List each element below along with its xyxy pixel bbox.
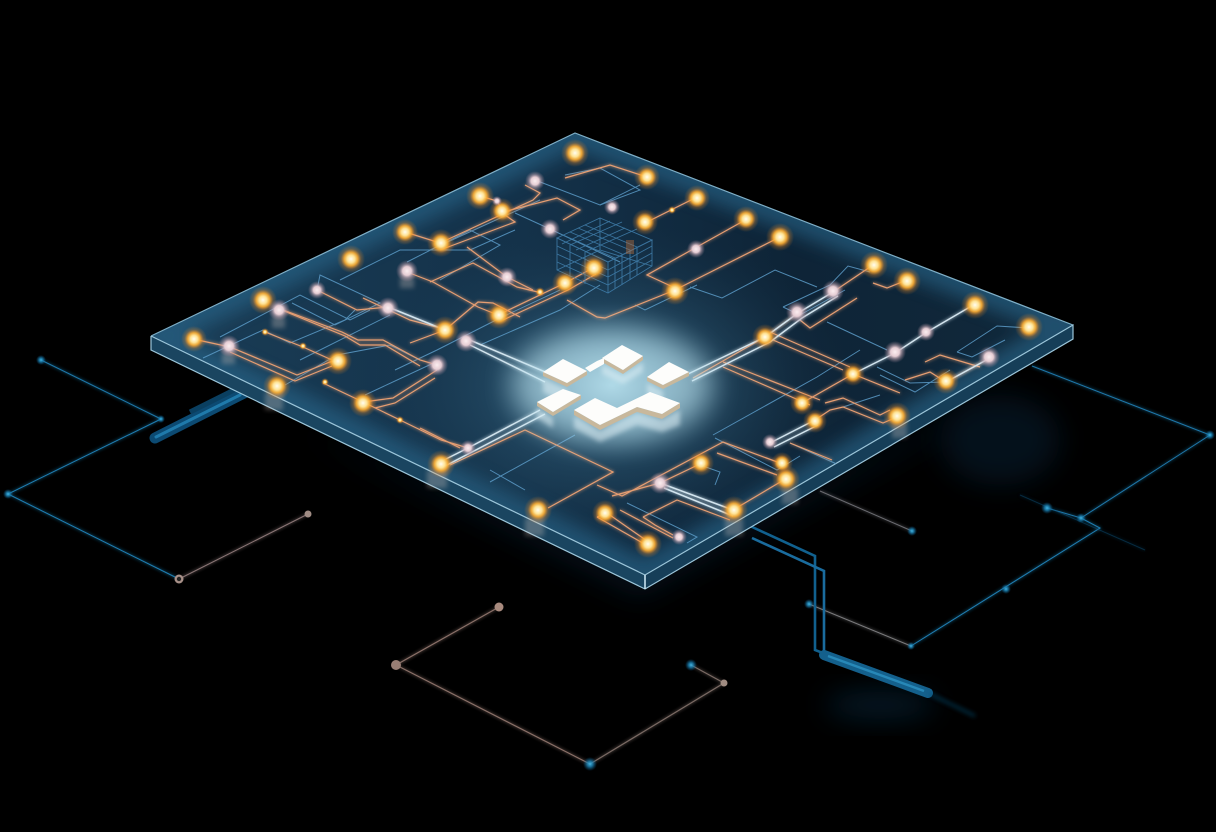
floating nodes bbox=[3, 355, 1215, 771]
wireframe cube bbox=[557, 218, 652, 293]
floating conduit: left bbox=[155, 376, 262, 438]
central chip reflections bbox=[537, 362, 680, 442]
floating conduit: lower right bbox=[750, 526, 975, 716]
floating traces: right bbox=[809, 366, 1210, 646]
amber nodes bbox=[181, 139, 1043, 558]
illustration: isometric glass circuit board bbox=[4, 132, 1215, 770]
white main traces into the chip bbox=[388, 292, 990, 516]
pink junction nodes bbox=[218, 171, 1000, 545]
blue circuit traces bbox=[203, 168, 1029, 543]
floating traces: left bbox=[8, 360, 308, 579]
orange circuit traces bbox=[193, 165, 990, 546]
floating traces: bottom centre bbox=[396, 607, 724, 764]
glow beneath board bbox=[300, 395, 1060, 719]
central chip cluster bbox=[537, 345, 689, 430]
board: glass slab bbox=[151, 133, 1073, 589]
central chip glow bbox=[512, 329, 712, 441]
edge reflections below nodes bbox=[222, 276, 907, 536]
